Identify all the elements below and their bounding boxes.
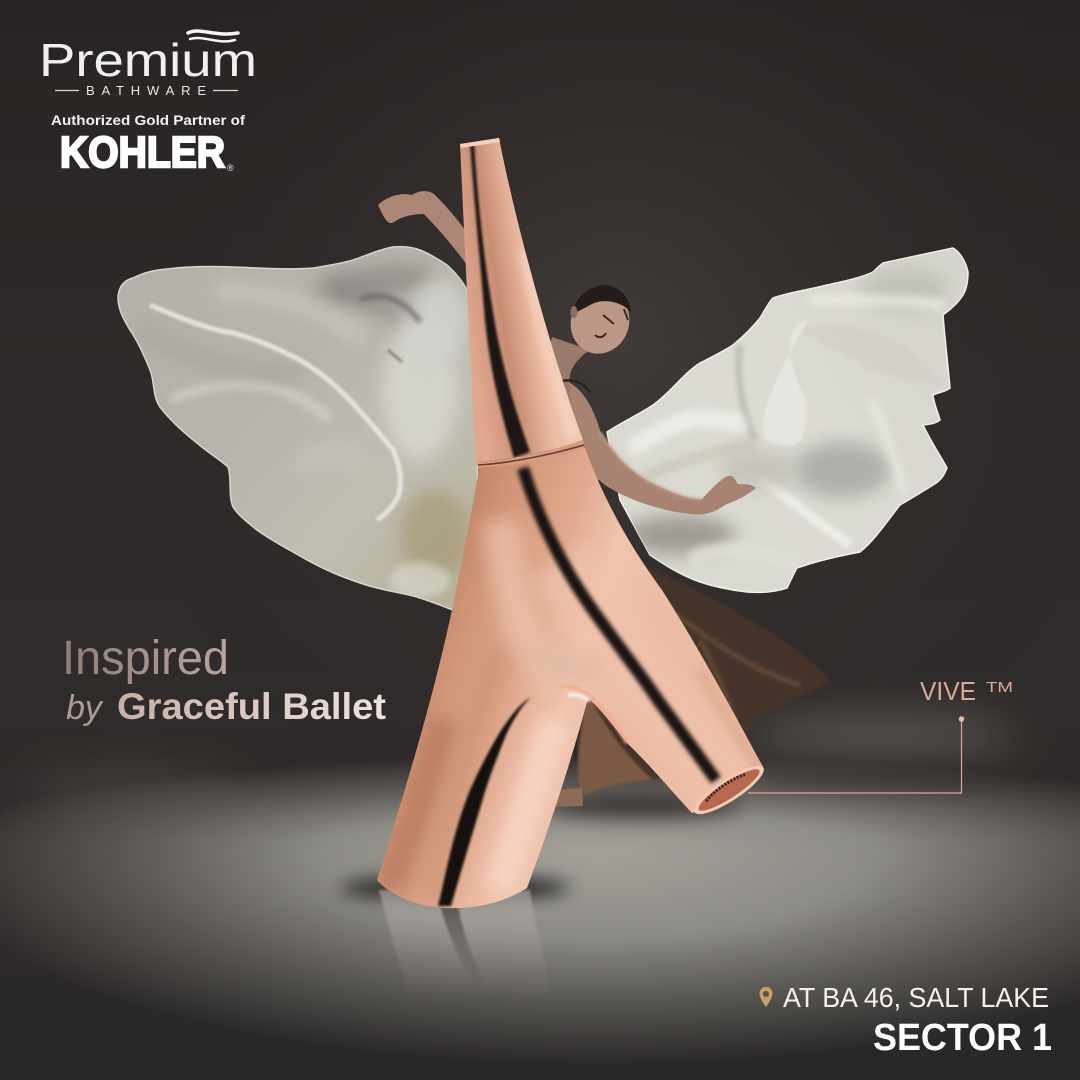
Kohler logo: KOHLER [60,128,225,177]
faucet: body dark streak [523,468,716,780]
headline: by [66,689,104,727]
faucet floor reflection [379,890,552,1000]
faucet: collar seam [476,440,585,470]
logo wordmark: Premium [39,34,257,86]
hair [572,285,631,314]
cloth: left wing [118,247,478,615]
crotch highlight [560,686,627,743]
faucet: lower body [377,448,763,908]
logo: Premium Bathware [39,31,257,98]
product callout: VIVE: VIVE [920,676,976,706]
head [562,282,638,362]
headline: Inspired [62,632,229,685]
extended right arm [570,383,756,515]
cloth: right wing [570,248,968,592]
sector: SECTOR 1 [873,1017,1052,1059]
faucet: spout mouth [689,758,769,822]
icon: map pin [760,987,772,1007]
location [760,982,1052,1059]
faucet [377,138,769,908]
product callout: VIVE: TM [986,679,1013,696]
raised left arm [378,191,472,272]
address: AT BA 46, SALT LAKE [783,982,1049,1013]
partner line: Authorized Gold Partner of [51,113,246,128]
logo waves [188,31,238,41]
faucet: upper stem [460,138,583,462]
neck and torso [540,337,610,480]
dancer skirt [554,565,831,807]
bright fold [150,305,401,520]
floor shadow under faucet [340,794,740,899]
product callout: VIVE [748,676,1013,793]
Kohler logo: ® [227,163,234,173]
ear [570,306,578,318]
logo sub-brand: BATHWARE [86,83,210,98]
dancer body and head [378,191,638,480]
eyes and mouth [595,309,628,337]
headline: Graceful Ballet [117,686,386,727]
faucet: arch dark streak [438,697,531,906]
headline [62,632,386,727]
bodice strap [562,380,590,392]
